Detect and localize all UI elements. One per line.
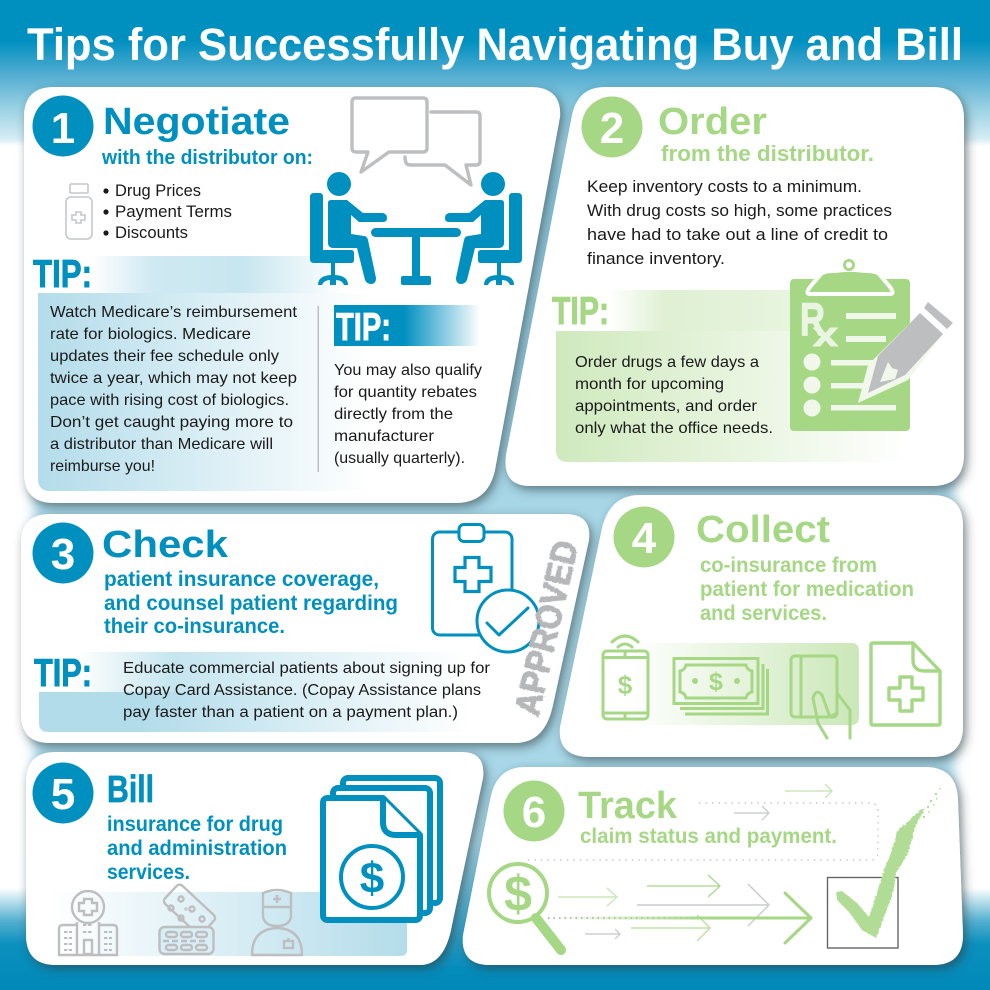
icon: invoice documents	[323, 778, 440, 920]
second tip text	[334, 362, 482, 467]
bullet list: Payment Terms	[115, 203, 232, 221]
tip text: pay faster than a patient on a payment plan.)	[123, 704, 458, 721]
tip text: only what the office needs.	[575, 420, 773, 437]
heading: order: Order	[658, 101, 767, 143]
second tip label	[334, 305, 480, 349]
second tip text: directly from the	[334, 406, 453, 423]
subheading	[107, 813, 287, 884]
icon: phone payment: $	[618, 670, 633, 700]
tip text: rate for biologics. Medicare	[50, 326, 251, 343]
icon: speech bubbles	[352, 98, 480, 185]
number badge 2: 2	[600, 104, 624, 153]
subheading: insurance for drug	[107, 813, 283, 836]
subheading: and administration	[107, 837, 287, 860]
subheading: their co-insurance.	[104, 615, 285, 638]
icon: cash stack	[674, 658, 768, 714]
subheading: and services.	[700, 602, 827, 625]
dotted path	[528, 803, 878, 860]
bullet list: Discounts	[115, 224, 188, 242]
tip label: TIP:	[34, 652, 92, 695]
bullet list: Drug Prices	[115, 182, 201, 200]
panel: 3 check	[21, 514, 589, 743]
heading: collect: Collect	[696, 509, 830, 551]
tip text: Don’t get caught paying more to	[50, 414, 293, 431]
number badge 3	[32, 522, 94, 584]
tip text: updates their fee schedule only	[50, 348, 279, 365]
icon: phone payment	[603, 636, 648, 719]
icon: magnifier with dollar: $	[504, 866, 532, 922]
stamp: approved: APPROVED	[508, 537, 586, 719]
subheading	[104, 568, 398, 638]
icon: two people at table	[310, 172, 522, 285]
tip text: pace with rising cost of biologics.	[50, 392, 289, 409]
icon: pill packs	[160, 883, 217, 954]
panel: 4 collect	[560, 495, 963, 757]
body text: With drug costs so high, some practices	[587, 202, 892, 220]
title: Tips for Successfully Navigating Buy and Bill	[27, 19, 963, 70]
tip text: twice a year, which may not keep	[50, 370, 297, 387]
number badge 6: 6	[522, 788, 546, 837]
icon: magnifier with dollar	[489, 864, 561, 950]
panel: 6 track	[463, 767, 963, 965]
heading: check: Check	[102, 524, 229, 566]
tip text: month for upcoming	[575, 376, 724, 393]
subheading	[700, 554, 914, 625]
heading: track: Track	[578, 785, 678, 827]
subheading: services.	[107, 861, 190, 884]
icon: prescription clipboard	[790, 259, 953, 431]
tip text: Order drugs a few days a	[575, 354, 759, 371]
payment band	[630, 643, 859, 725]
subheading: patient insurance coverage,	[104, 568, 379, 591]
icon: medical document	[871, 643, 940, 725]
icon band	[50, 892, 407, 956]
subheading: claim status and payment.	[580, 825, 837, 848]
second tip text: manufacturer	[334, 428, 435, 445]
number badge 6	[504, 780, 564, 842]
tip text: appointments, and order	[575, 398, 758, 415]
panel: 1 negotiate	[24, 87, 560, 503]
second tip text: You may also qualify	[334, 362, 482, 379]
icon: nurse	[252, 890, 302, 955]
number badge 4	[614, 506, 674, 568]
number badge 3: 3	[51, 530, 75, 579]
tip text: Educate commercial patients about signing up for	[123, 660, 490, 677]
tip box background	[38, 256, 370, 491]
checkbox	[828, 878, 898, 948]
tip box background	[39, 652, 470, 732]
number badge 1	[32, 96, 94, 156]
bullet list	[103, 182, 232, 242]
icon: hospital	[59, 891, 117, 955]
subheading: co-insurance from	[700, 554, 877, 577]
icon: card in hand	[791, 656, 850, 738]
number badge 5	[32, 762, 94, 824]
second tip text: (usually quarterly).	[334, 450, 465, 467]
tip text	[50, 304, 298, 475]
tip text	[123, 660, 490, 721]
icon: clipboard with check	[432, 524, 539, 652]
panel: 2 order	[506, 87, 964, 486]
number badge 5: 5	[51, 770, 75, 819]
number badge 1: 1	[51, 104, 75, 153]
subheading: and counsel patient regarding	[104, 592, 398, 615]
tip text: reimburse you!	[50, 458, 155, 475]
tip text: Copay Card Assistance. (Copay Assistance plans	[123, 682, 481, 699]
tip label: TIP:	[33, 253, 92, 296]
tip box background	[556, 290, 910, 462]
arrows	[548, 784, 832, 943]
icon: prescription clipboard: R	[800, 293, 825, 345]
heading: bill: Bill	[107, 769, 154, 811]
subheading: with the distributor on:	[101, 147, 313, 169]
body text	[587, 178, 892, 268]
tip text: a distributor than Medicare will	[50, 436, 273, 453]
second tip label: TIP:	[336, 306, 391, 349]
icon: prescription clipboard: x	[813, 316, 838, 354]
icon: cash stack: $	[709, 668, 723, 696]
body text: finance inventory.	[587, 250, 725, 268]
subheading: patient for medication	[700, 578, 914, 601]
tip text: Watch Medicare’s reimbursement	[50, 304, 298, 321]
icon: invoice documents: $	[360, 854, 384, 903]
brush check mark	[836, 788, 940, 938]
panel: 5 bill	[26, 752, 483, 965]
number badge 4: 4	[632, 514, 657, 563]
body text: Keep inventory costs to a minimum.	[587, 178, 862, 196]
subheading: from the distributor.	[661, 141, 874, 166]
tip label: TIP:	[552, 290, 609, 333]
second tip text: for quantity rebates	[334, 384, 477, 401]
icon: medicine bottle	[66, 184, 92, 239]
heading: negotiate: Negotiate	[103, 101, 290, 143]
body text: have had to take out a line of credit to	[587, 226, 888, 244]
tip text	[575, 354, 773, 437]
number badge 2	[582, 96, 642, 158]
